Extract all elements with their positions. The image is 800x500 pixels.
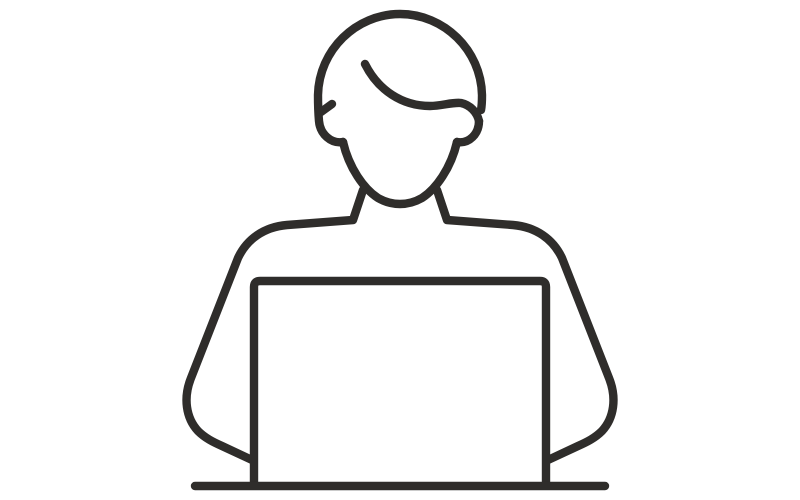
right ear	[457, 121, 479, 142]
laptop	[254, 281, 546, 484]
body right	[437, 190, 613, 460]
body left	[187, 190, 363, 460]
table line	[195, 482, 605, 490]
hair tick at left ear	[321, 104, 332, 112]
hair fringe	[365, 64, 479, 121]
face	[343, 142, 457, 204]
hair and left ear outline	[318, 14, 482, 142]
